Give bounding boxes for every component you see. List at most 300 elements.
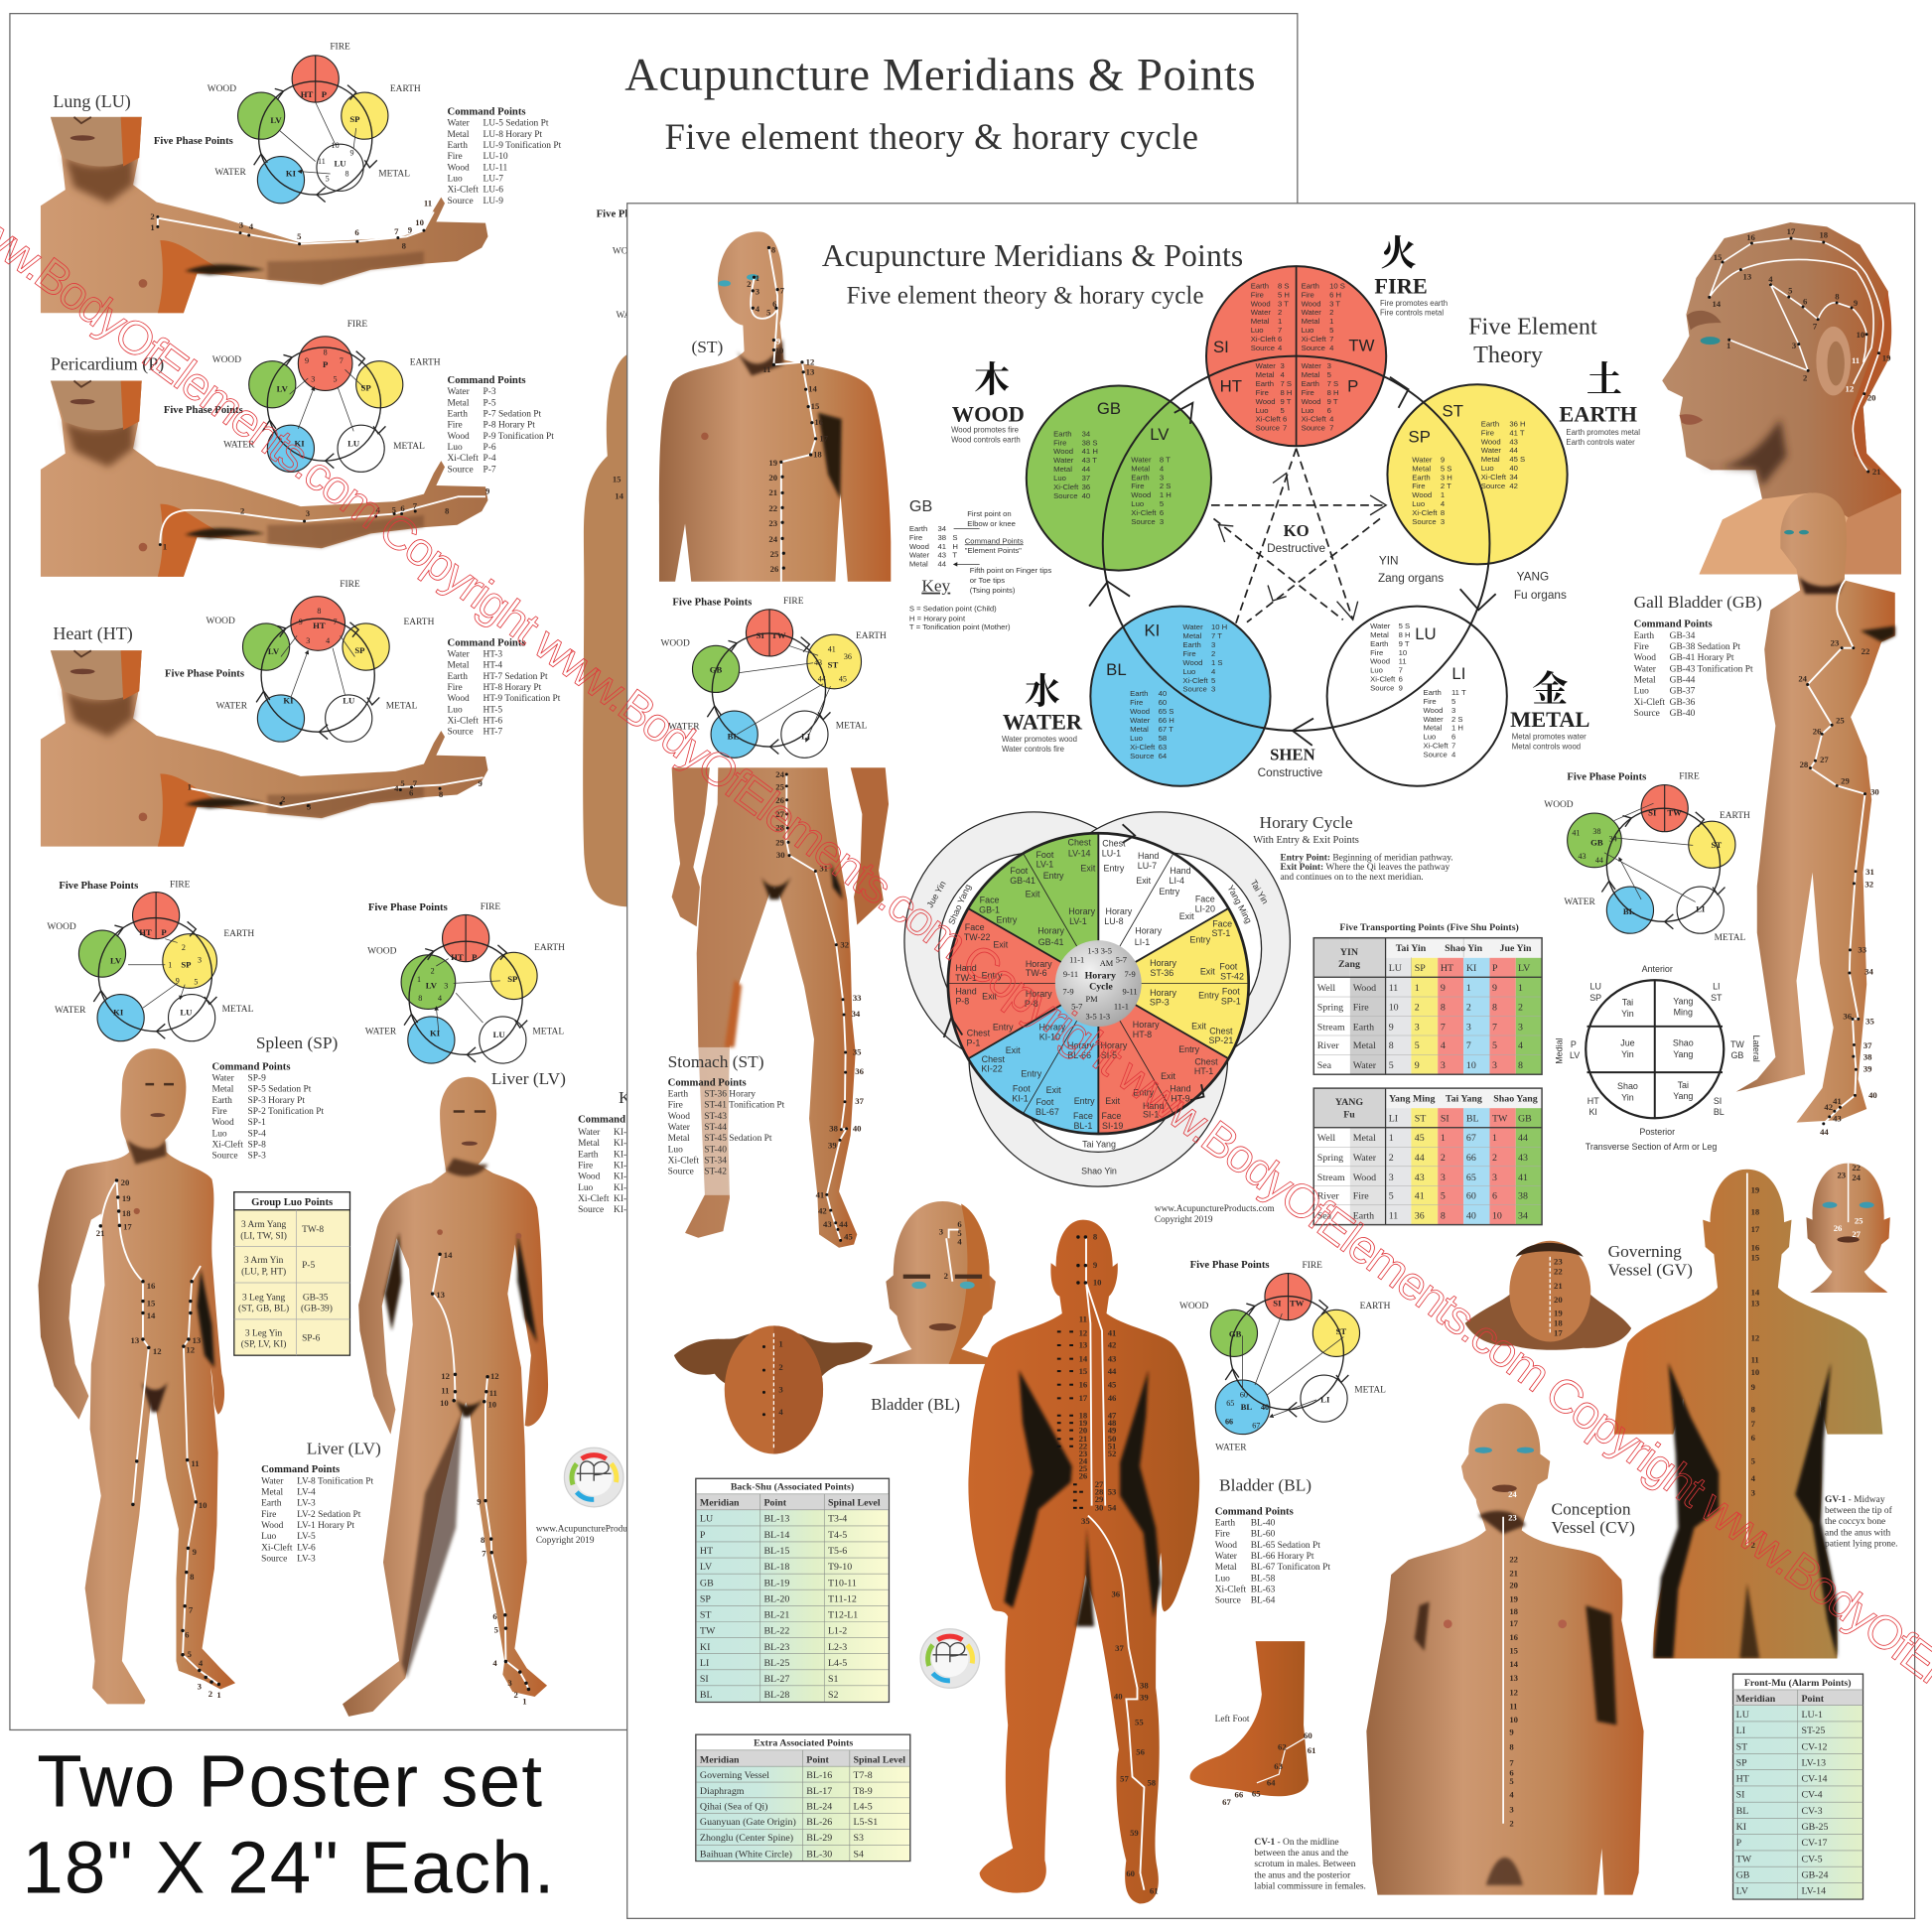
- earth text: 36 H: [1509, 419, 1526, 428]
- table: five transporting yin: 4: [1518, 1040, 1523, 1051]
- figure: conception vessel body: 9: [1509, 1726, 1514, 1736]
- fire text: Water: [1302, 308, 1321, 317]
- wheel sector text: Chest: [967, 1029, 991, 1038]
- wheel sector text: Foot: [1222, 987, 1240, 997]
- label: water element: [1002, 671, 1083, 754]
- figure: liver body: 3: [507, 1678, 512, 1688]
- wheel centre hub: [1055, 940, 1142, 1027]
- hub text: 9-11: [1063, 969, 1078, 979]
- figure: governing vessel face: 26: [1834, 1223, 1843, 1233]
- five phase diagram: gall bladder: BL: [1623, 906, 1635, 916]
- water text: 58: [1159, 734, 1167, 743]
- wheel sector text: Horary: [1150, 958, 1176, 968]
- figure: lung arm: 4: [249, 221, 254, 231]
- five phase diagram: gall bladder: 38: [1592, 827, 1600, 836]
- water text: [1106, 621, 1227, 760]
- phase labels: stomach: METAL: [836, 721, 868, 731]
- phase labels: spleen: FIRE: [170, 881, 191, 891]
- chart: transverse section: Yang: [1673, 1091, 1693, 1101]
- figure: bladder back body: 38: [1140, 1680, 1149, 1690]
- label: fire element: Fire controls metal: [1380, 309, 1444, 318]
- command points: lung: LU-6: [483, 186, 503, 196]
- table: five transporting yang: 41: [1518, 1173, 1528, 1183]
- water text: 63: [1159, 743, 1167, 752]
- command points: gall bladder: [1634, 619, 1753, 719]
- figure: governing vessel back: 17: [1751, 1224, 1760, 1234]
- note: cv-1: labial commissure in females.: [1254, 1881, 1366, 1892]
- heading: horary cycle: and continues on to the next meridian.: [1280, 873, 1424, 883]
- figure: stomach upper body: 25: [770, 549, 779, 559]
- figure: liver body: [343, 1077, 548, 1717]
- chart: transverse section: LI: [1713, 982, 1721, 992]
- figure: bladder back body: 48: [1108, 1418, 1117, 1428]
- back poster website: www.AcupunctureProducts.com: [536, 1525, 656, 1535]
- figure: gall bladder head profile: 21: [1872, 467, 1880, 477]
- table: five transporting yang: LI: [1389, 1113, 1398, 1124]
- figure: gall bladder body: 43: [1833, 1113, 1842, 1123]
- partly hidden kidney labels: Wood: [578, 1173, 601, 1182]
- partly hidden kidney labels: Five Phase: [597, 207, 645, 219]
- table: back-shu points: Back-Shu (Associated Points): [731, 1481, 854, 1492]
- wheel sector text: Chest: [1068, 837, 1091, 847]
- five phase diagram: lung: HT: [301, 89, 314, 99]
- phase labels: bladder: METAL: [1354, 1385, 1386, 1395]
- five phase diagram: lung: 10: [332, 141, 340, 150]
- wheel sector text: Chest: [1102, 839, 1126, 849]
- phase labels: bladder: FIRE: [1303, 1261, 1322, 1271]
- table: back-shu points: HT: [700, 1546, 713, 1557]
- figure: gall bladder head profile: 19: [1882, 353, 1891, 363]
- figure: spleen body: 15: [147, 1299, 156, 1309]
- command points: stomach: ST-40: [704, 1145, 727, 1155]
- fire text: Wood: [1302, 299, 1321, 308]
- wheel outer and sub dividers: [944, 824, 1249, 1134]
- figure: spleen body: 1: [216, 1690, 221, 1700]
- figure: gall bladder head profile: 9: [1854, 298, 1859, 308]
- table: back-shu points: BL-13: [763, 1514, 789, 1525]
- yin yang labels: YIN: [1379, 554, 1399, 567]
- figure: stomach legs: 45: [844, 1232, 853, 1242]
- figure: governing vessel face: 24: [1852, 1173, 1862, 1182]
- label: left foot: Left Foot: [1215, 1714, 1250, 1725]
- table: back-shu points: BL-23: [763, 1642, 789, 1653]
- table: back-shu points: T5-6: [828, 1546, 847, 1557]
- command points: heart: HT-5: [483, 705, 502, 715]
- hub text: PM: [1085, 994, 1098, 1004]
- wood text: Wood: [1053, 447, 1073, 456]
- wheel sector text: KI-22: [981, 1064, 1003, 1074]
- phase labels: stomach: Five Phase Points: [672, 596, 752, 608]
- figure: stomach upper body: 18: [813, 449, 822, 459]
- wheel sector text: SP-21: [1209, 1035, 1233, 1045]
- command points: lung: LU-5 Sedation Pt: [483, 119, 549, 129]
- figure: bladder back body: 36: [1111, 1588, 1121, 1598]
- five phase diagram: lung: SP: [349, 114, 360, 124]
- water text: Earth: [1182, 640, 1201, 649]
- fire text: Source: [1302, 344, 1325, 352]
- command points: heart: Wood: [448, 694, 470, 704]
- table: five transporting yang: 67: [1466, 1133, 1476, 1144]
- wheel sector text: LI-1: [1135, 937, 1150, 947]
- phase labels: liver: FIRE: [481, 902, 500, 912]
- five phase diagram: lung: LV: [270, 115, 282, 125]
- label: metal element: Metal controls wood: [1512, 743, 1581, 752]
- phase labels: liver: METAL: [532, 1027, 564, 1036]
- table: five transporting yin: Metal: [1353, 1040, 1376, 1051]
- wood text: Source: [1131, 517, 1156, 526]
- fire text: Metal: [1256, 370, 1275, 379]
- figure: stomach upper body: 1: [756, 273, 759, 283]
- figure: gall bladder body: 39: [1863, 1064, 1872, 1074]
- water text: Water: [1182, 622, 1203, 631]
- phase labels: spleen: WOOD: [47, 922, 76, 932]
- figure: conception vessel body: 18: [1509, 1606, 1519, 1616]
- heading: horary cycle: With Entry & Exit Points: [1253, 835, 1359, 846]
- figure: liver body: 1: [522, 1696, 527, 1706]
- five phase diagram: stomach: SI: [757, 630, 764, 640]
- command points: gall bladder: Luo: [1634, 687, 1649, 697]
- table: five transporting yin: 9: [1389, 1023, 1394, 1034]
- water text: 67 T: [1159, 725, 1173, 734]
- panel: lung meridian: [41, 43, 562, 313]
- phase labels: heart: METAL: [386, 702, 418, 712]
- phase labels: bladder: [1179, 1259, 1391, 1453]
- table: five transporting yin: LU: [1389, 963, 1402, 974]
- table: five transporting yang: 40: [1466, 1210, 1476, 1221]
- table: five transporting yang: 45: [1415, 1133, 1425, 1144]
- figure: governing vessel back: 8: [1751, 1404, 1756, 1414]
- figure: governing vessel back: 5: [1751, 1455, 1756, 1465]
- wheel sector text: ST-42: [1220, 972, 1244, 982]
- hub text: Horary: [1085, 970, 1116, 981]
- command points: gall bladder: GB-34: [1670, 631, 1696, 641]
- wheel sector text: LV-14: [1068, 849, 1091, 859]
- ring labels: [924, 878, 1270, 1176]
- five phase diagram: stomach: 43: [814, 658, 822, 667]
- chart: transverse section: Posterior: [1639, 1127, 1675, 1137]
- figure: liver body: 4: [492, 1658, 497, 1668]
- figure: governing vessel face: 22: [1852, 1163, 1861, 1173]
- wheel sector text: Hand: [1170, 1084, 1191, 1094]
- figure: gall bladder body: 35: [1865, 1016, 1874, 1026]
- figure: bladder back body: 8: [1093, 1232, 1098, 1242]
- five phase diagram: bladder: [1210, 1274, 1360, 1435]
- wheel sector text: Horary: [1068, 906, 1096, 916]
- five phase diagram: gall bladder: TW: [1667, 808, 1682, 818]
- fire text: Water: [1256, 361, 1276, 370]
- five phase diagram: lung: 9: [349, 148, 353, 157]
- note: cv-1: CV-1 - On the midline: [1254, 1838, 1339, 1848]
- command points: spleen: Xi-Cleft: [211, 1139, 243, 1150]
- table: group luo points: (LI, TW, SI): [240, 1230, 287, 1241]
- command points: pericardium: Luo: [448, 443, 463, 453]
- figure: pericardium arm: 8: [445, 506, 450, 516]
- chart: transverse section: BL: [1714, 1107, 1725, 1117]
- figure: spleen body: 18: [122, 1208, 131, 1218]
- label: water element: WATER: [1003, 710, 1083, 735]
- fire text: Water: [1251, 308, 1271, 317]
- command points: pericardium: P-8 Horary Pt: [483, 421, 535, 431]
- legend: key: 44: [937, 560, 947, 569]
- label: stomach short: (ST): [691, 338, 723, 356]
- command points: gall bladder: Water: [1634, 664, 1657, 674]
- command points: stomach: ST-45 Sedation Pt: [704, 1134, 772, 1144]
- water text: 66 H: [1159, 716, 1174, 725]
- note: cv-1: scrotum in males. Between: [1254, 1860, 1356, 1869]
- legend: key: (Tsing points): [970, 586, 1016, 595]
- wood text: 40: [1082, 491, 1090, 500]
- wood text: GB: [1097, 399, 1121, 418]
- command points: gall bladder: Earth: [1634, 631, 1654, 641]
- hub text: AM: [1100, 958, 1114, 968]
- figure: spleen body: 13: [131, 1335, 140, 1345]
- earth text: 1: [1441, 490, 1445, 499]
- legend: key: Earth: [909, 524, 927, 533]
- figure: liver body: 8: [481, 1535, 485, 1545]
- table: front-mu points: GB-25: [1801, 1822, 1828, 1833]
- earth text: Fire: [1412, 482, 1426, 490]
- table: five transporting yin: Jue Yin: [1500, 943, 1532, 954]
- metal text: Metal: [1423, 724, 1443, 733]
- table: back-shu points: BL: [700, 1690, 713, 1701]
- phase labels: spleen: EARTH: [223, 929, 254, 939]
- figure: conception vessel body: 3: [1509, 1805, 1514, 1815]
- command points: spleen: Earth: [211, 1096, 232, 1106]
- figure: bladder back body: 13: [1079, 1340, 1088, 1350]
- command points: bladder: Fire: [1215, 1530, 1230, 1540]
- table: five transporting yang: SI: [1441, 1113, 1449, 1124]
- command points: stomach: Source: [668, 1168, 694, 1177]
- figure: governing vessel back: 15: [1751, 1253, 1760, 1263]
- wheel sector text: Horary: [1038, 1023, 1066, 1033]
- wood text: Fire: [1053, 438, 1066, 447]
- figure: bladder back body: 26: [1079, 1470, 1088, 1480]
- table: five transporting yang: 2: [1441, 1153, 1446, 1164]
- wheel sector text: Horary: [1067, 1040, 1094, 1050]
- table: five transporting yin: Zang: [1338, 959, 1360, 970]
- figure: gall bladder body: 37: [1863, 1040, 1872, 1050]
- wheel sector text: Entry: [1021, 1069, 1042, 1079]
- phase labels: bladder: WOOD: [1179, 1302, 1208, 1311]
- command points: stomach: Luo: [668, 1145, 683, 1155]
- fire text: 6: [1283, 415, 1287, 424]
- table: five transporting yin: 5: [1389, 1060, 1394, 1071]
- wheel sector text: Exit: [1161, 1071, 1175, 1081]
- legend: key: Water: [909, 551, 930, 560]
- figure: bladder back body: 60: [1126, 1868, 1135, 1878]
- note: gv-1: GV-1 - Midway: [1825, 1495, 1885, 1505]
- phase labels: heart: WATER: [216, 702, 248, 712]
- table: five transporting yin: Well: [1317, 983, 1335, 994]
- wood text: 3: [1160, 473, 1164, 482]
- figure: stomach legs: 33: [853, 993, 862, 1003]
- table: group luo points: P-5: [302, 1261, 315, 1271]
- figure: liver body: 14: [444, 1250, 453, 1260]
- fire text: 3 T: [1329, 299, 1340, 308]
- table: group luo points: 3 Leg Yin: [245, 1328, 283, 1338]
- table: five transporting yang: Earth: [1353, 1210, 1374, 1221]
- wheel sector text: GB-41: [1010, 876, 1035, 886]
- fire text: 2: [1278, 308, 1282, 317]
- figure: conception vessel body: 19: [1509, 1593, 1519, 1603]
- wheel sector text: Face: [1212, 918, 1232, 928]
- figure: bladder back body: [968, 1220, 1199, 1903]
- wood text: Wood: [1131, 490, 1151, 499]
- table: group luo points: (SP, LV, KI): [241, 1338, 286, 1349]
- figure: bladder back body: 47: [1108, 1410, 1117, 1420]
- figure: bladder back body: 49: [1108, 1425, 1117, 1435]
- fire text: Fire: [1302, 388, 1314, 397]
- wood text: LV: [1150, 425, 1170, 444]
- command points: bladder: BL-65 Sedation Pt: [1251, 1541, 1320, 1551]
- figure: stomach upper body: [659, 231, 891, 582]
- five phase diagram: spleen: LV: [110, 956, 122, 966]
- fire text: Fire: [1302, 290, 1314, 299]
- figure: bladder back body: 40: [1114, 1691, 1123, 1701]
- wheel sector text: Exit: [1200, 967, 1215, 977]
- heading: conception vessel: Conception: [1552, 1499, 1631, 1518]
- figure: stomach legs: [672, 767, 889, 1248]
- five phase diagram: pericardium: P: [323, 359, 329, 369]
- figure: gall bladder head profile: 18: [1819, 230, 1829, 240]
- wheel sector text: [955, 837, 1244, 1131]
- legend: key: T = Tonification point (Mother): [909, 622, 1011, 631]
- table: back-shu points: BL-15: [763, 1546, 789, 1557]
- heading: bladder: Bladder (BL): [1219, 1476, 1311, 1495]
- earth text: Earth: [1412, 473, 1431, 482]
- phase labels: bladder: EARTH: [1360, 1302, 1391, 1311]
- five phase diagram: pericardium: 8: [324, 347, 328, 356]
- heading: conception vessel: [1552, 1499, 1635, 1537]
- command points: bladder: BL-60: [1251, 1530, 1276, 1540]
- wheel sector text: Entry: [1104, 863, 1125, 873]
- fire text: 5 H: [1278, 290, 1290, 299]
- figure: liver body: 7: [482, 1548, 486, 1558]
- figure: conception vessel body: 10: [1509, 1715, 1518, 1725]
- command points: spleen: Water: [211, 1073, 235, 1083]
- wood text: Water: [1053, 456, 1074, 465]
- chart: transverse section: LV: [1570, 1050, 1580, 1060]
- command points: liver: Luo: [261, 1532, 277, 1542]
- front poster frame: [627, 204, 1915, 1918]
- figure: stomach legs: 24: [775, 769, 785, 779]
- command points: stomach: ST-44: [704, 1123, 727, 1133]
- figure: bladder back body: 58: [1147, 1777, 1157, 1787]
- figure: stomach upper body: 8: [771, 244, 776, 254]
- command points: stomach: ST-34: [704, 1157, 727, 1167]
- figure: stomach legs: 44: [839, 1219, 849, 1229]
- wheel sector text: LV-1: [1069, 916, 1087, 926]
- label: earth element: 土: [1587, 359, 1622, 400]
- legend: key: T: [952, 551, 957, 560]
- figure: bladder head top view: 4: [778, 1407, 783, 1417]
- label: earth element: Earth controls water: [1566, 438, 1635, 447]
- wheel sector text: Chest: [1209, 1026, 1233, 1035]
- figure: lung arm: 3: [239, 220, 244, 230]
- fire text: 5: [1329, 326, 1333, 335]
- table: extra associated points: S4: [853, 1849, 864, 1860]
- table: five transporting yin: Fire: [1353, 1003, 1369, 1014]
- figure: spleen body: 12: [186, 1345, 195, 1355]
- earth text: Earth: [1481, 419, 1499, 428]
- wheel sector text: Face: [1102, 1111, 1121, 1121]
- figure: liver body: 10: [440, 1398, 449, 1408]
- heading: stomach: Stomach (ST): [668, 1052, 764, 1071]
- command points: lung: LU-10: [483, 152, 508, 162]
- table: five transporting yin: 2: [1415, 1003, 1420, 1014]
- figure: bladder back body: 59: [1130, 1828, 1139, 1838]
- five phase diagram: pericardium: LU: [347, 438, 360, 448]
- table: back-shu points: BL-14: [763, 1530, 789, 1541]
- figure: lung arm: 9: [408, 225, 413, 235]
- metal text: 2 S: [1451, 715, 1463, 724]
- figure: stomach legs: 36: [855, 1066, 865, 1076]
- table: front-mu points: LU: [1736, 1710, 1749, 1721]
- command points: liver: Command Points: [261, 1463, 340, 1475]
- figure: spleen body: 4: [199, 1658, 204, 1668]
- figure: bladder back body: 37: [1115, 1643, 1125, 1653]
- metal text: Luo: [1423, 733, 1436, 742]
- five phase diagram: heart: 8: [317, 607, 321, 616]
- wood text: [1053, 399, 1172, 526]
- command points: stomach: Wood: [668, 1112, 690, 1122]
- table: front-mu points: LV-14: [1801, 1886, 1826, 1897]
- figure: liver body: 11: [441, 1386, 450, 1396]
- earth circle: [1387, 384, 1568, 564]
- ring labels: Yang Ming: [1225, 884, 1254, 925]
- chart: transverse section: Tai: [1622, 998, 1633, 1008]
- water text: 1 S: [1211, 658, 1223, 667]
- figure: pericardium arm: 1: [163, 542, 167, 552]
- water text: KI: [1144, 621, 1160, 639]
- five phase diagram: stomach: [692, 610, 862, 758]
- wheel sector text: Exit: [1026, 889, 1040, 898]
- earth text: 44: [1509, 446, 1519, 455]
- wheel sector text: SI-19: [1102, 1121, 1123, 1131]
- phase labels: stomach: WOOD: [660, 638, 690, 648]
- table: front-mu points: Point: [1801, 1694, 1825, 1705]
- five phase diagram: heart: SP: [354, 645, 365, 655]
- metal text: Metal: [1370, 630, 1389, 639]
- five phase diagram: bladder: SI: [1273, 1299, 1282, 1309]
- figure: stomach legs: 35: [853, 1046, 862, 1056]
- table: front-mu points: LI: [1736, 1725, 1745, 1736]
- phase labels: pericardium: WATER: [223, 441, 255, 451]
- five phase diagram: bladder: 40: [1261, 1403, 1269, 1412]
- figure: pericardium arm: [41, 380, 490, 577]
- water text: 4: [1211, 667, 1216, 676]
- phase labels: lung: METAL: [378, 169, 410, 179]
- earth text: Source: [1412, 517, 1437, 526]
- figure: partially hidden kidney body: [583, 353, 628, 906]
- phase labels: gall bladder: Five Phase Points: [1567, 771, 1646, 783]
- five phase diagram: lung: 8: [345, 169, 349, 178]
- figure: stomach upper body: 21: [768, 487, 777, 497]
- ko label: [1267, 521, 1326, 555]
- earth text: 43: [1509, 437, 1518, 446]
- fire text: Fire: [1256, 388, 1269, 397]
- stomach label backing: [698, 1047, 730, 1195]
- phase labels: bladder: Five Phase Points: [1190, 1259, 1270, 1271]
- figure: left foot: 66: [1235, 1790, 1244, 1800]
- fire text: Source: [1302, 424, 1325, 433]
- caption: two poster set: [22, 1739, 554, 1908]
- fire text: 2: [1329, 308, 1333, 317]
- metal text: LU: [1415, 624, 1437, 643]
- fire text: TW: [1348, 337, 1375, 355]
- command points: spleen: Source: [211, 1152, 238, 1162]
- table: extra associated points: Point: [806, 1754, 830, 1765]
